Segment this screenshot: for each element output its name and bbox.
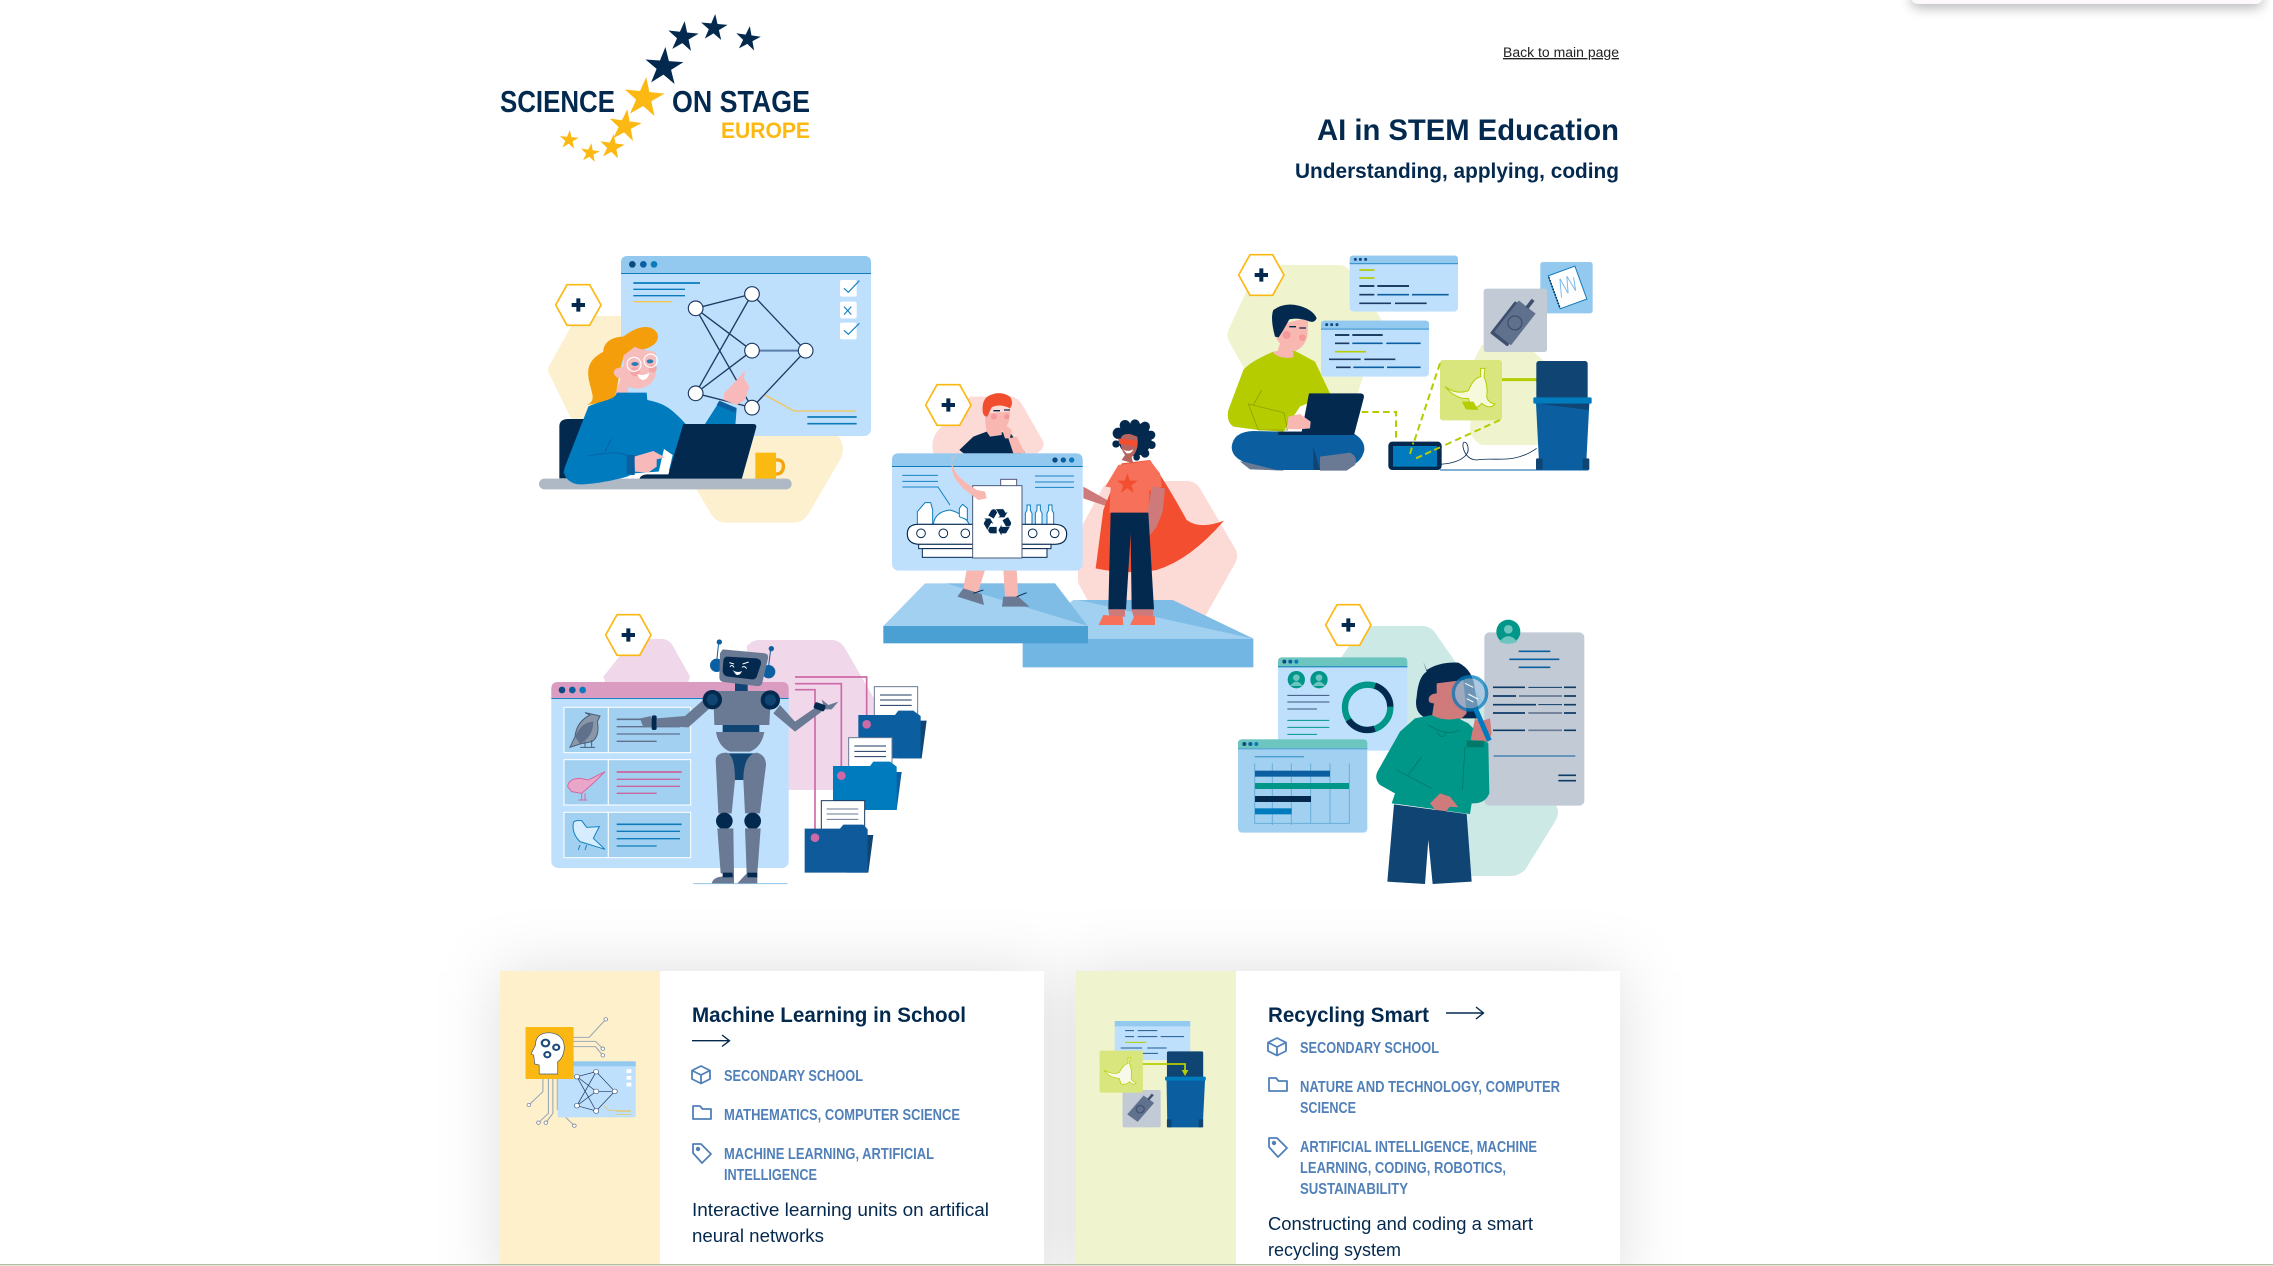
title: AI in STEM Education (1317, 114, 1619, 147)
logo: Science on Stage Europe: ON STAGE (672, 84, 810, 119)
bottom edge strip (0, 1264, 2273, 1266)
card 1 subjects: MATHEMATICS, COMPUTER SCIENCE (724, 1107, 960, 1124)
card 2 tags: ARTIFICIAL INTELLIGENCE, MACHINE (1300, 1139, 1537, 1156)
illustration: robot classifying birds (551, 639, 927, 884)
logo: Science on Stage Europe: SCIENCE (500, 84, 615, 119)
illustration: woman with magnifier inspecting documents (1238, 620, 1584, 884)
card 1 level: SECONDARY SCHOOL (724, 1068, 863, 1085)
card: Recycling Smart (1076, 971, 1620, 1264)
card 1 arrow (692, 1035, 730, 1046)
subtitle: Understanding, applying, coding (1295, 160, 1619, 183)
card 1 description: Interactive learning units on artifical (692, 1199, 989, 1220)
card 2 subjects: SCIENCE (1300, 1100, 1356, 1117)
card shadows (500, 971, 1620, 1266)
logo: Science on Stage Europe (500, 13, 810, 162)
card: Machine Learning in School (500, 971, 1044, 1264)
card 1 tags: INTELLIGENCE (724, 1167, 817, 1184)
card 1 heading: Machine Learning in School (692, 1003, 966, 1027)
popup edge, top right (1911, 0, 2263, 8)
card 2 tags: LEARNING, CODING, ROBOTICS, (1300, 1160, 1506, 1177)
badge: illustration 2 plus (926, 385, 971, 425)
card 2 tags: SUSTAINABILITY (1300, 1181, 1409, 1198)
card 1 description: neural networks (692, 1225, 824, 1246)
back link: Back to main page (1503, 45, 1619, 60)
card 2 heading: Recycling Smart (1268, 1003, 1429, 1027)
card 1 thumbnail (526, 1018, 636, 1127)
badge: illustration 5 plus (1326, 605, 1371, 645)
card 1 level (692, 1066, 863, 1085)
card 2 description (1268, 1213, 1533, 1260)
card 2 subjects (1269, 1078, 1560, 1117)
card 2 level (1268, 1038, 1439, 1057)
card 2 description: Constructing and coding a smart (1268, 1213, 1533, 1234)
card 2 subjects: NATURE AND TECHNOLOGY, COMPUTER (1300, 1079, 1560, 1096)
card 1 tags (693, 1144, 934, 1184)
card 2 arrow (1446, 1007, 1484, 1019)
card 1 description (692, 1199, 989, 1246)
illustration: woman with neural network (539, 256, 871, 523)
logo: Science on Stage Europe: EUROPE (721, 118, 810, 143)
illustration: recycling kids on podium (883, 393, 1253, 667)
card 2 tags (1269, 1138, 1537, 1198)
badge: illustration 1 plus (556, 285, 601, 325)
illustration: recycling kids on podium: ♻ (981, 502, 1014, 544)
badge: illustration 4 plus (606, 615, 651, 655)
card 2 thumbnail (1100, 1021, 1206, 1127)
card 2 level: SECONDARY SCHOOL (1300, 1040, 1439, 1057)
card 1 tags: MACHINE LEARNING, ARTIFICIAL (724, 1146, 934, 1163)
badge: illustration 3 plus (1239, 255, 1284, 295)
card 2 description: recycling system (1268, 1239, 1401, 1260)
illustration: man coding recycling bin (1227, 256, 1593, 471)
